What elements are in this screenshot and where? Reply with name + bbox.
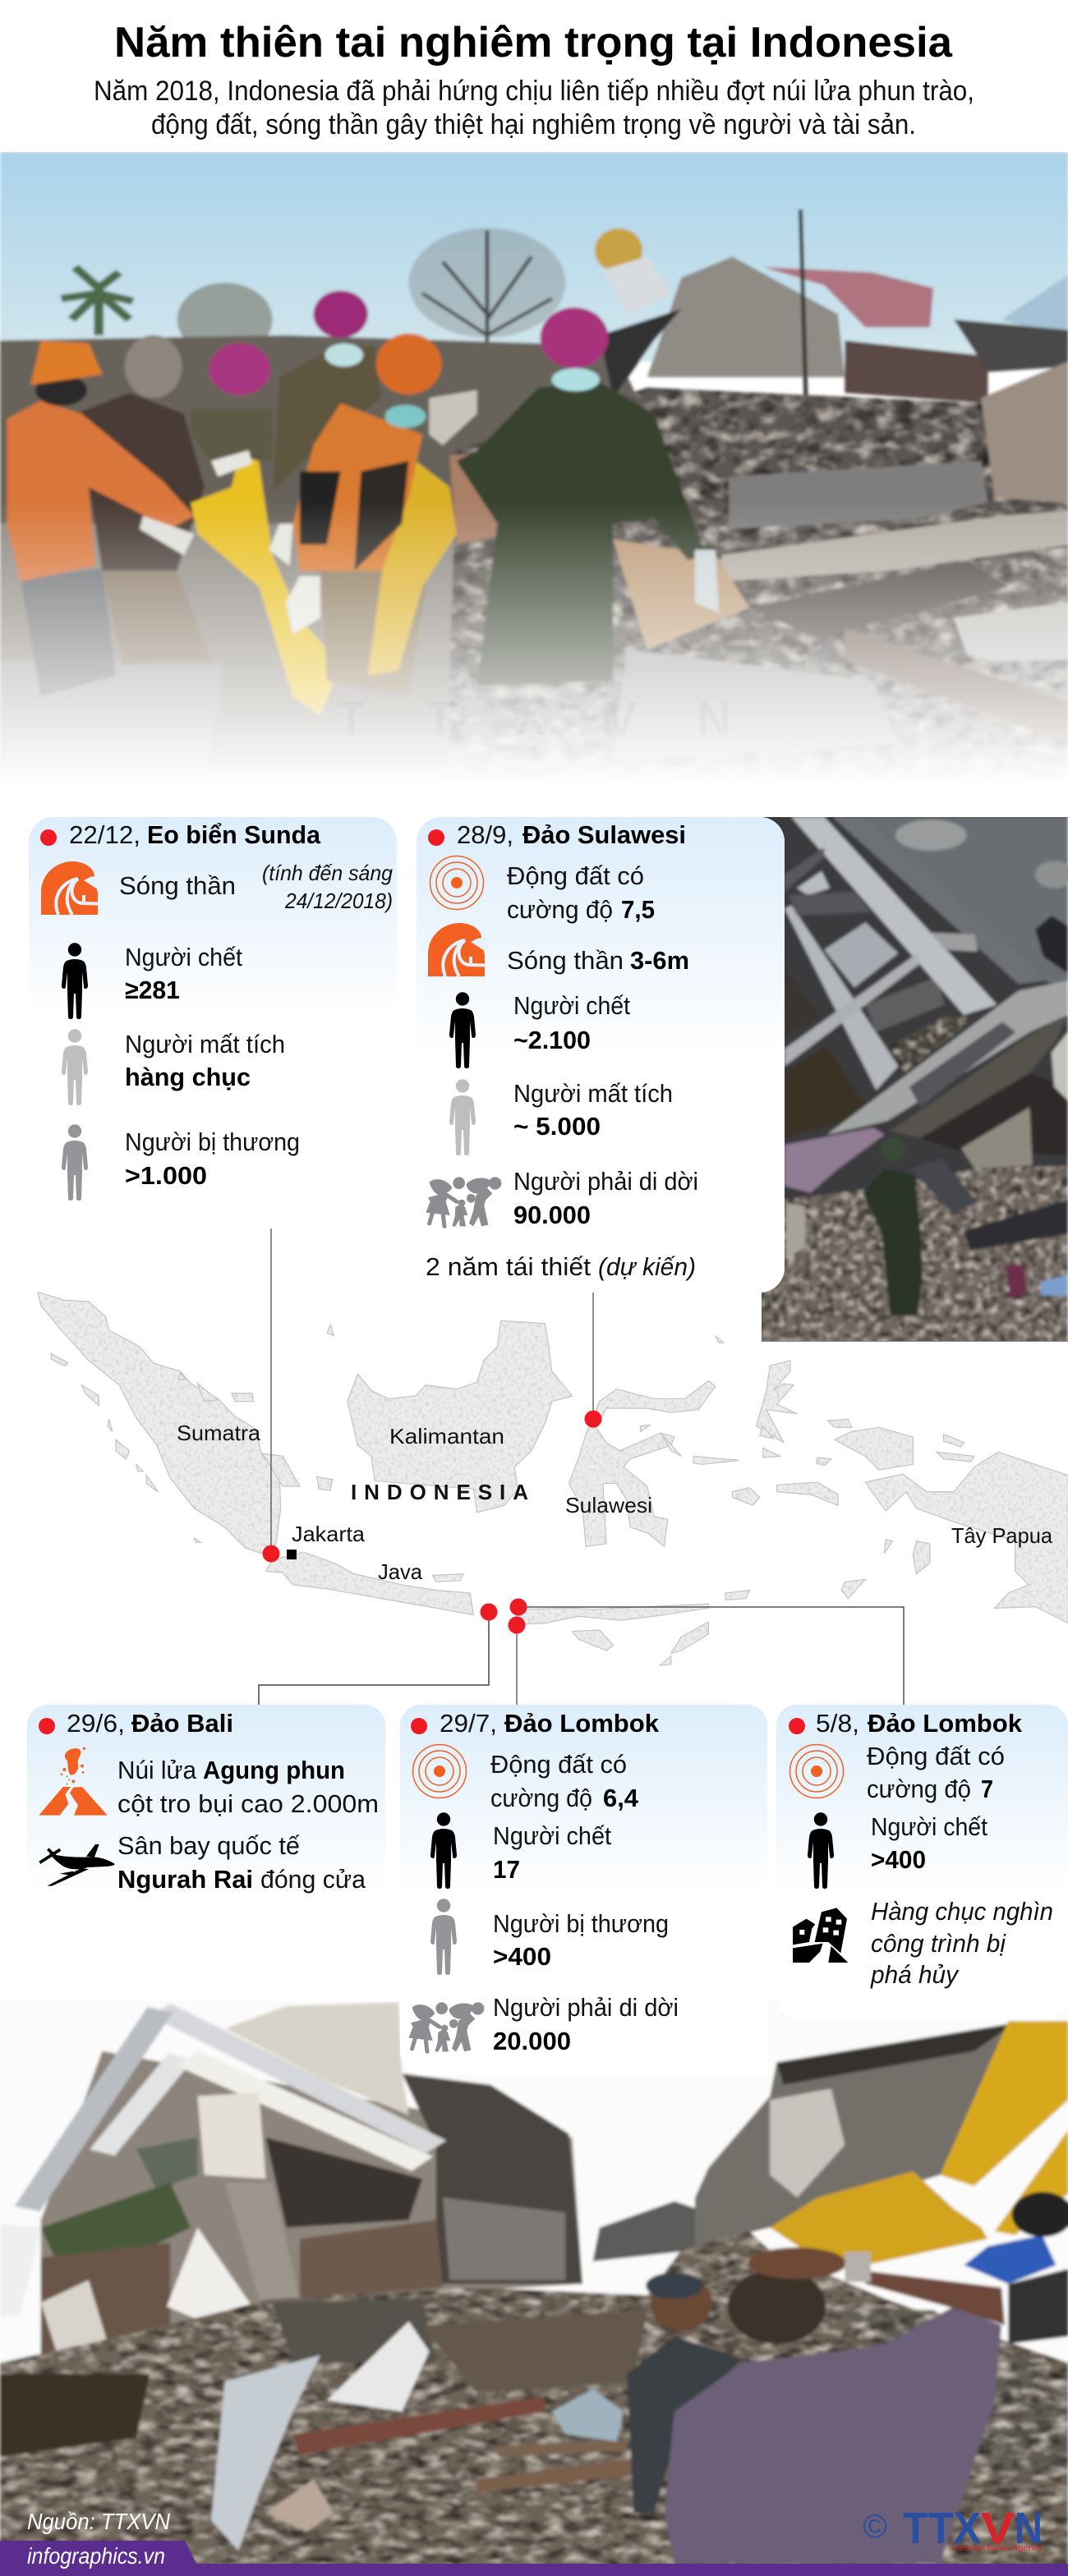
subtitle: Năm 2018, Indonesia đã phải hứng chịu liên tiếp nhiều đợt núi lửa phun trào, [94,76,974,107]
stat: injured: >1.000 [125,1161,207,1190]
icon: tsunami [41,861,100,915]
text: tsunami height: 3-6m [630,946,689,975]
text: tsunami: Sóng thần [119,871,236,900]
leader line: Lombok 5/8 [518,1607,904,1706]
heading: Sunda [40,820,321,849]
marker: Sunda [263,1545,279,1562]
icon: tsunami [428,923,487,976]
note: as of 24/12/2018: 24/12/2018) [284,889,393,913]
marker: Lombok 29/7 [508,1616,526,1634]
stat: injured: Người bị thương [493,1909,669,1938]
note: as of 24/12/2018: (tính đến sáng [262,861,394,885]
text: tsunami height [507,946,689,975]
panel: Sunda strait tsunami [29,817,397,1201]
logo: TTXVN: Vietnam News Agency [951,2544,1043,2553]
map label: INDONESIA: INDONESIA [351,1480,528,1504]
map label: Sumatra: Sumatra [177,1421,261,1445]
footer bar [0,2541,1068,2576]
stat: missing: Người mất tích [513,1079,673,1108]
text: magnitude [507,861,655,924]
stat: deaths: Người chết [125,943,242,971]
heading: Sulawesi: Đảo Sulawesi [522,820,686,849]
stat: injured [430,1899,669,1975]
text: magnitude [490,1750,639,1812]
text: destroyed buildings: công trình bị [871,1929,1006,1958]
stat: missing: hàng chục [125,1063,251,1091]
icon: earthquake [790,1744,843,1798]
text: magnitude: Động đất có [507,861,644,890]
text: magnitude: cường độ [507,895,613,924]
heading: Sunda: Eo biển Sunda [147,820,321,849]
leader line: Lombok 29/7 [516,1625,518,1706]
map label: Java: Java [378,1559,423,1584]
stat: deaths [62,943,242,1019]
map label: Sulawesi: Sulawesi [565,1493,652,1518]
heading: Bali [39,1709,233,1738]
title: Năm thiên tai nghiêm trọng tại Indonesia [114,19,953,67]
photo: rescuers carrying a body bag through rubble [0,152,1068,821]
stat: deaths: Người chết [871,1812,987,1841]
stat: deaths: Người chết [513,991,630,1020]
text: Ngurah Rai airport closed [117,1831,366,1894]
subtitle [94,76,974,140]
text: destroyed buildings: Hàng chục nghìn [871,1897,1053,1926]
logo: TTXVN: V [981,2504,1015,2553]
text: magnitude: Động đất có [490,1750,627,1779]
stat: displaced: Người phải di dời [493,1993,679,2022]
icon: earthquake [430,856,483,910]
heading: Sunda: 22/12, [69,820,140,849]
heading: Lombok 5/8: Đảo Lombok [868,1709,1023,1738]
subtitle: động đất, sóng thần gây thiệt hại nghiêm trọng về người và tài sản. [151,109,916,140]
people [75,393,205,571]
photo: rescuers carrying a body bag through rubble: TTXVN [337,692,731,746]
text: Agung eruption: cột tro bụi cao 2.000m [117,1789,379,1818]
heading: Sulawesi [428,820,686,849]
stat: injured: Người bị thương [125,1127,300,1156]
heading: Lombok 29/7: 29/7, [440,1709,497,1738]
stat: deaths: >400 [871,1845,926,1874]
logo: TTXVN [863,2504,1043,2553]
text: destroyed buildings [870,1897,1053,1989]
stat: deaths [449,991,630,1068]
marker: Lombok 5/8 [509,1598,527,1616]
photo: flattened buildings and excavator [0,1987,1068,2576]
heading: Lombok 29/7 [411,1709,660,1738]
heading: Bali: Đảo Bali [131,1709,233,1738]
heading: Lombok 5/8 [789,1709,1023,1738]
text: magnitude: Động đất có [867,1742,1005,1770]
text: destroyed buildings: phá hủy [870,1960,960,1989]
heading: Lombok 29/7: Đảo Lombok [504,1709,660,1738]
stat: injured: >400 [493,1942,551,1971]
leader line: Bali [259,1612,489,1706]
text: magnitude: cường độ [490,1784,592,1812]
logo: TTXVN: © [863,2509,887,2545]
source: Nguồn: TTXVN [27,2509,171,2534]
stat: displaced: 90.000 [513,1201,591,1229]
stat: displaced: Người phải di dời [513,1167,698,1196]
text: Ngurah Rai airport closed: đóng cửa [260,1865,366,1894]
text: magnitude [867,1742,1005,1803]
heading: Bali: 29/6, [67,1709,125,1738]
stat: injured [62,1124,300,1201]
stat: missing [62,1029,285,1105]
logo: TTXVN: TTX [903,2504,981,2553]
marker: Bali [480,1603,498,1621]
stat: deaths [808,1812,987,1889]
panel: Lombok 5/8 [776,1705,1068,2020]
stat: deaths: 17 [493,1855,520,1884]
map label: Jakarta: Jakarta [292,1522,366,1546]
text: rebuilding time: 2 năm tái thiết [426,1252,591,1281]
text: magnitude: 7,5 [621,895,655,924]
stat: deaths [430,1812,611,1889]
stat: displaced [408,1993,679,2055]
leader line: Sunda [270,1228,272,1554]
stat: deaths: ≥281 [125,976,180,1004]
leader line: Sulawesi [592,1292,594,1419]
text: Agung eruption [117,1756,379,1818]
text: tsunami height: Sóng thần [507,946,624,975]
panel: Lombok 29/7 [400,1705,767,2075]
heading: Lombok 5/8: 5/8, [816,1709,859,1738]
map of Indonesia [38,1292,1068,1665]
text: Agung eruption: Agung phun [203,1756,345,1784]
panel: Sulawesi earthquake [417,817,785,1293]
footer bar: infographics.vn [27,2543,165,2569]
stat: deaths: ~2.100 [513,1026,591,1054]
stat: displaced [426,1167,698,1229]
text: rebuilding time: (dự kiến) [598,1252,696,1281]
icon: earthquake [412,1744,467,1798]
logo: TTXVN: N [1015,2504,1043,2553]
stat: displaced: 20.000 [493,2027,571,2055]
text: magnitude: 7 [981,1775,993,1803]
map label: Kalimantan: Kalimantan [389,1424,504,1449]
photo: collapsed building in Sulawesi [756,813,1068,1350]
stat: missing [449,1079,673,1155]
icon: volcano [39,1747,108,1816]
panel: Bali volcano [27,1705,385,1894]
text: Agung eruption: Núi lửa [117,1756,197,1784]
text: magnitude: 6,4 [603,1784,639,1812]
note: as of 24/12/2018 [262,861,394,913]
text: rebuilding time [426,1252,696,1281]
icon: damaged buildings [793,1908,848,1963]
heading: Sulawesi: 28/9, [457,820,513,849]
text: Ngurah Rai airport closed: Sân bay quốc tế [117,1831,300,1860]
text: magnitude: cường độ [867,1775,971,1803]
stat: deaths: Người chết [493,1821,611,1850]
stat: missing: ~ 5.000 [513,1112,601,1141]
marker: Jakarta square [287,1550,297,1559]
text: Ngurah Rai airport closed: Ngurah Rai [117,1865,253,1894]
map label: Tây Papua: Tây Papua [951,1523,1053,1548]
marker: Sulawesi [585,1411,601,1427]
stat: missing: Người mất tích [125,1030,285,1058]
icon: airplane [39,1844,115,1886]
